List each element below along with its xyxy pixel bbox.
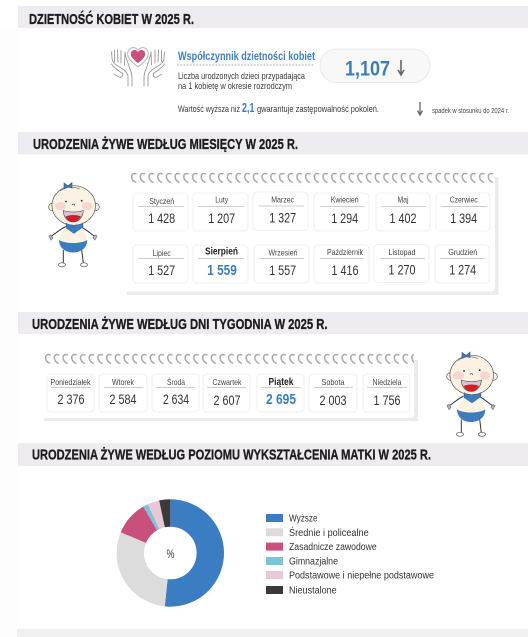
text: fertility definition: Liczba urodzonych dzieci przypadająca [178, 71, 306, 82]
card: September: Wrzesień [268, 248, 298, 258]
card: Tuesday: Wtorek [112, 377, 135, 387]
panel: births by month [18, 132, 528, 295]
card: June: 1 394 [450, 210, 477, 226]
heading: months [18, 132, 528, 154]
card: Friday (highest): 2 695 [266, 391, 296, 408]
card: July: 1 527 [148, 262, 175, 278]
card: October [314, 245, 369, 283]
card: March: 1 327 [269, 210, 296, 226]
card: September: 1 557 [269, 262, 296, 278]
callout: fertility value: 1,107 [345, 58, 390, 80]
card: Sunday [363, 374, 410, 412]
text: fertility definition: na 1 kobietę w okresie rozrodczym [178, 81, 292, 92]
legend: decrease arrow: spadek w stosunku do 2024 r. [432, 108, 509, 115]
card: Monday: Poniedziałek [50, 377, 91, 387]
card: May: 1 402 [390, 210, 417, 226]
card: Sunday: 1 756 [374, 392, 401, 408]
text: fertility definition [177, 51, 315, 92]
card: Monday: 2 376 [58, 391, 85, 407]
card: December: 1 274 [449, 262, 476, 278]
card: February: 1 207 [208, 210, 235, 226]
card: Saturday: 2 003 [320, 392, 347, 408]
card: Wednesday [152, 374, 199, 412]
card: Thursday: 2 607 [214, 392, 241, 408]
icon: baby left [49, 182, 99, 267]
card: September [254, 245, 309, 283]
card: Friday (highest) [257, 374, 304, 412]
legend item: higher: Wyższe [289, 514, 318, 524]
card: January: Styczeń [149, 196, 174, 206]
card: Sunday: Niedziela [372, 377, 402, 387]
legend item: higher [266, 514, 318, 524]
card: Wednesday: 2 634 [163, 391, 189, 407]
card: November [374, 244, 429, 282]
legend item: secondary: Średnie i policealne [289, 526, 369, 539]
card: April: Kwiecień [331, 194, 359, 204]
panel: fertility [18, 6, 528, 115]
text: fertility definition: Współczynnik dzietności kobiet [178, 51, 315, 63]
card: Thursday: Czwartek [212, 377, 242, 387]
callout: fertility value [320, 49, 430, 82]
donut chart [130, 513, 210, 593]
legend item: unknown [266, 586, 337, 596]
card: January: 1 428 [148, 210, 175, 226]
card: November: Listopad [388, 247, 416, 257]
legend item: unknown: Nieustalone [289, 586, 337, 596]
calendar: months [123, 172, 498, 295]
heading: fertility [18, 6, 528, 28]
card: July: Lipiec [153, 248, 171, 258]
card: May [376, 193, 430, 231]
legend item: secondary [266, 526, 369, 539]
card: August (highest) [193, 245, 248, 283]
card: Wednesday: Środa [167, 376, 185, 387]
text: replacement note: Wartość wyższa niż [178, 104, 240, 115]
card: November: 1 270 [388, 262, 416, 278]
card: August (highest): Sierpień [205, 246, 238, 258]
heading: months: URODZENIA ŻYWE WEDŁUG MIESIĘCY W 2025 R. [33, 136, 298, 153]
card: Tuesday [99, 374, 147, 412]
icon: baby right [447, 352, 497, 436]
card: April [314, 193, 369, 231]
heading: weekdays: URODZENIA ŻYWE WEDŁUG DNI TYGODNIA W 2025 R. [32, 316, 328, 333]
card: January [133, 193, 188, 231]
legend item: primary: Podstawowe i niepełne podstawowe [289, 570, 434, 582]
card: December: Grudzień [448, 247, 477, 257]
legend: education [266, 514, 434, 596]
card: Monday [47, 374, 94, 412]
card: October: Październik [327, 247, 364, 257]
card: June [436, 193, 490, 231]
card: May: Maj [398, 194, 409, 204]
donut centre label: % [166, 547, 175, 561]
card: Friday (highest): Piątek [268, 377, 294, 388]
calendar: weekdays [42, 353, 418, 421]
legend item: vocational: Zasadnicze zawodowe [289, 542, 377, 553]
heading: weekdays [18, 312, 528, 334]
card: July [133, 245, 188, 283]
card: Tuesday: 2 584 [110, 391, 137, 407]
legend item: lower secondary: Gimnazjalne [289, 556, 338, 568]
panel: births by mother's education [18, 443, 528, 596]
text: replacement note [178, 101, 379, 115]
card: Thursday [203, 374, 250, 412]
card: February [193, 193, 248, 231]
heading: fertility: DZIETNOŚĆ KOBIET W 2025 R. [29, 10, 194, 28]
card: October: 1 416 [332, 262, 359, 278]
card: Saturday: Sobota [322, 377, 345, 387]
card: March [253, 192, 308, 230]
text: replacement note: gwarantuje zastępowalność pokoleń. [257, 104, 379, 115]
card: Saturday [309, 374, 357, 412]
card: June: Czerwiec [450, 194, 478, 204]
card: December [435, 245, 489, 283]
card: March: Marzec [271, 194, 295, 204]
legend: decrease arrow [418, 102, 509, 115]
icon: hands holding heart [112, 48, 164, 86]
card: August (highest): 1 559 [207, 262, 237, 279]
card: February: Luty [215, 194, 229, 204]
text: replacement note: 2,1 [242, 101, 255, 115]
panel: births by weekday [18, 312, 528, 436]
legend item: lower secondary [266, 556, 338, 568]
card: April: 1 294 [331, 210, 358, 226]
